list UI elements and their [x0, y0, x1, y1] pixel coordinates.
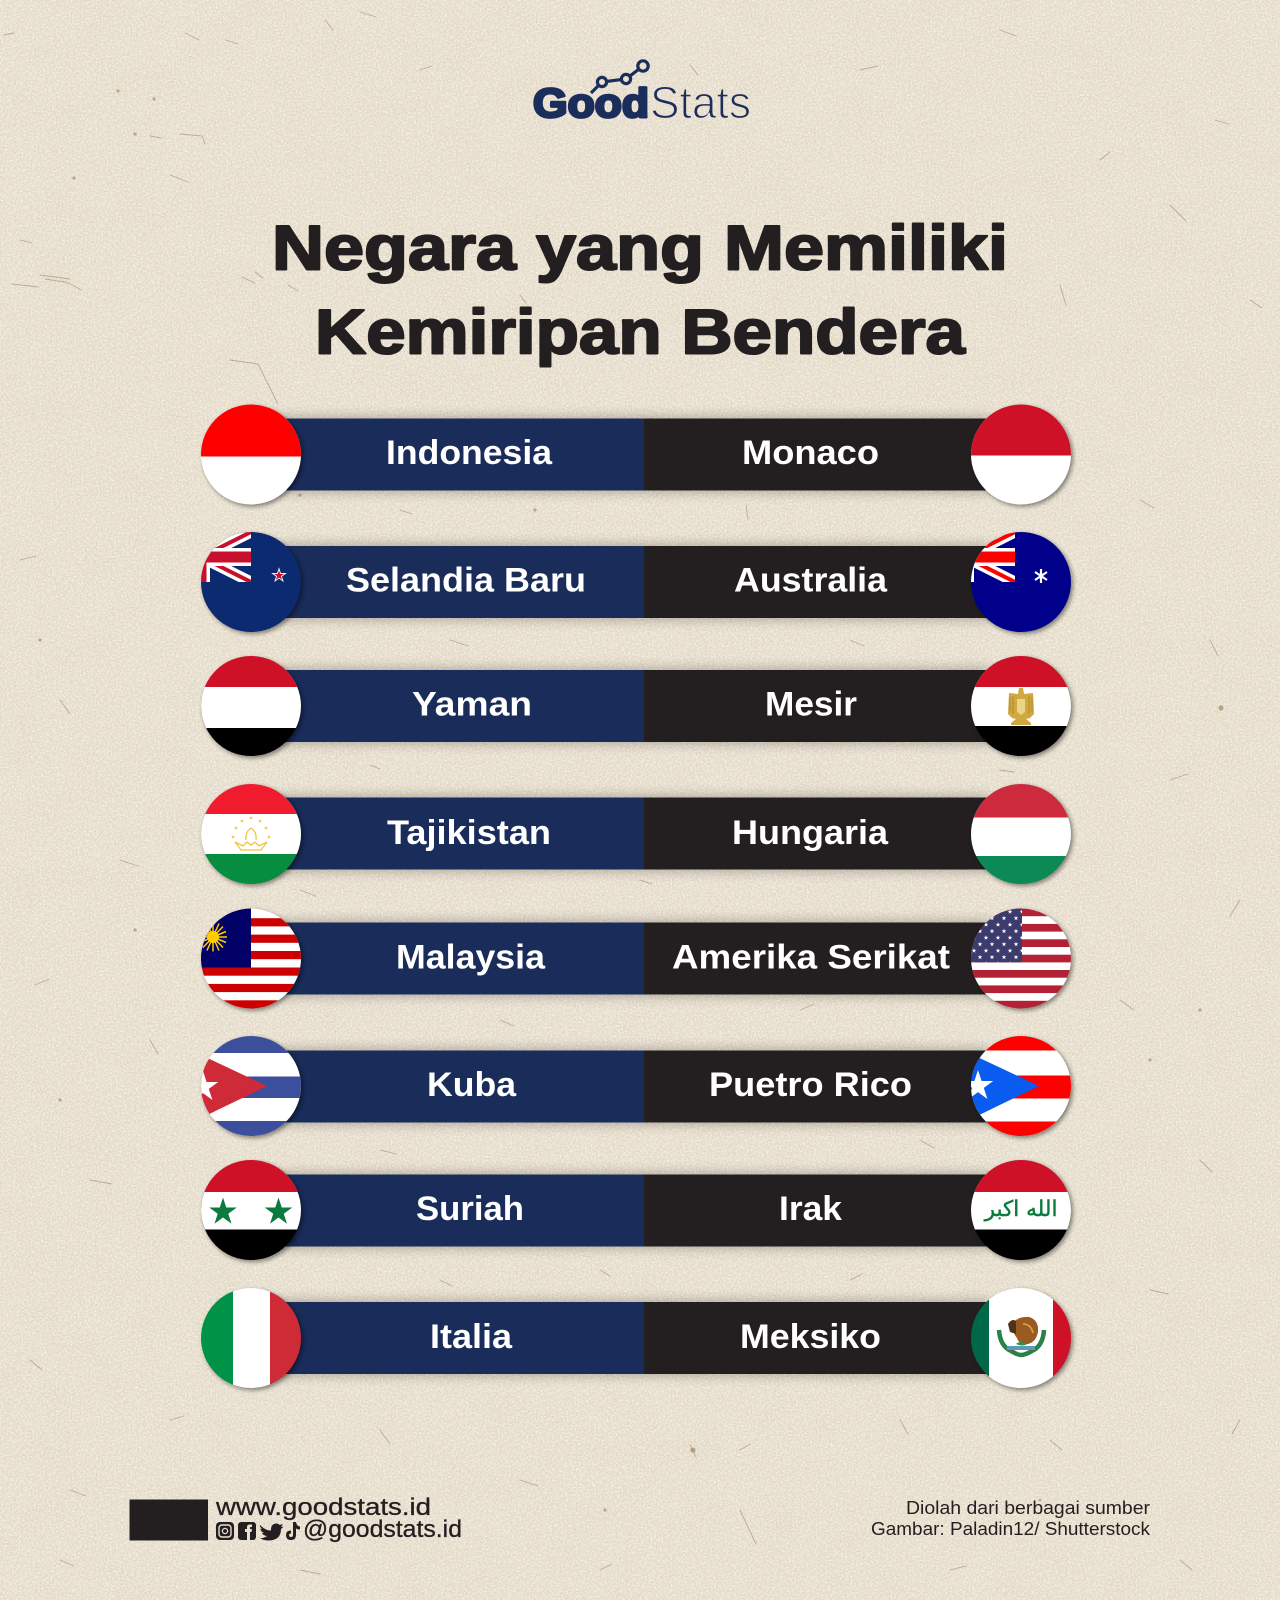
bar right black [644, 1050, 994, 1122]
bar left navy [270, 1050, 644, 1122]
social handle text: @goodstats.id [303, 1516, 462, 1543]
footer: website and socials [130, 1494, 462, 1543]
bar left navy [270, 418, 644, 490]
label: Yaman: Yaman [412, 686, 532, 724]
row: Tajikistan / Hungaria [201, 784, 1073, 886]
label: Amerika Serikat: Amerika Serikat [672, 938, 951, 976]
flag: Malaysia [199, 908, 301, 1008]
label: Selandia Baru: Selandia Baru [346, 562, 586, 600]
label: Mesir: Mesir [765, 686, 857, 724]
icon: instagram [216, 1522, 234, 1540]
flag: United States [971, 908, 1071, 1008]
label: Suriah: Suriah [416, 1190, 524, 1228]
flag: Hungary [971, 784, 1071, 884]
title [272, 214, 1008, 368]
bar right black [644, 1174, 994, 1246]
source line: Diolah dari berbagai sumber [906, 1498, 1150, 1518]
label: Monaco: Monaco [742, 434, 879, 472]
label: Malaysia: Malaysia [396, 938, 546, 976]
flag: Egypt [971, 656, 1071, 756]
logo wordmark light: Stats [650, 77, 751, 128]
bar left navy [270, 546, 644, 618]
row: Malaysia / Amerika Serikat [199, 908, 1073, 1010]
bar right black [644, 1302, 994, 1374]
row: Kuba / Puetro Rico [188, 1036, 1073, 1138]
logo: GoodStats [533, 61, 751, 128]
source credits [871, 1498, 1151, 1539]
row: Yaman / Mesir [201, 656, 1073, 758]
flag: New Zealand [201, 532, 301, 632]
bar left navy [270, 922, 644, 994]
label: Meksiko: Meksiko [740, 1318, 881, 1356]
icon: twitter [260, 1524, 284, 1540]
website text: www.goodstats.id [215, 1494, 431, 1521]
bar right black [644, 546, 994, 618]
label: Irak: Irak [779, 1190, 843, 1228]
flag: Indonesia [201, 404, 301, 504]
bar left navy [270, 1174, 644, 1246]
flag: Iraq [971, 1160, 1071, 1260]
flag: Yemen [201, 656, 301, 756]
flag: Tajikistan [201, 784, 301, 884]
flag: Mexico [971, 1288, 1071, 1388]
bar left navy [270, 1302, 644, 1374]
label: Italia: Italia [430, 1318, 513, 1356]
title line 2: Kemiripan Bendera [315, 298, 966, 368]
title line 1: Negara yang Memiliki [272, 214, 1008, 284]
bar right black [644, 922, 994, 994]
image credit line: Gambar: Paladin12/ Shutterstock [871, 1519, 1151, 1539]
logo chart line icon [591, 61, 648, 93]
flag: Cuba [201, 1036, 301, 1136]
footer black box [130, 1500, 208, 1540]
flag: Puerto Rico [963, 1036, 1071, 1136]
bar left navy [270, 798, 644, 870]
bar right black [644, 670, 994, 742]
row: Selandia Baru / Australia [151, 532, 1073, 634]
icon: facebook [238, 1522, 256, 1540]
flag: Monaco [971, 404, 1071, 504]
flag: Syria [201, 1160, 301, 1260]
flag: Australia [971, 532, 1071, 632]
flag: Iraq: الله اكبر [984, 1197, 1057, 1222]
row: Italia / Meksiko [201, 1288, 1073, 1390]
row: Suriah / Irak [201, 1160, 1073, 1262]
bar left navy [270, 670, 644, 742]
flag: Italy [201, 1288, 301, 1388]
label: Australia: Australia [734, 562, 888, 600]
label: Kuba: Kuba [427, 1066, 517, 1104]
icon: tiktok [286, 1522, 300, 1540]
logo wordmark: Good [533, 80, 649, 126]
label: Indonesia: Indonesia [386, 434, 553, 472]
bar right black [644, 798, 994, 870]
bar right black [644, 418, 994, 490]
label: Puetro Rico: Puetro Rico [709, 1066, 912, 1104]
label: Tajikistan: Tajikistan [387, 814, 551, 852]
row: Indonesia / Monaco [201, 404, 1073, 506]
label: Hungaria: Hungaria [732, 814, 889, 852]
